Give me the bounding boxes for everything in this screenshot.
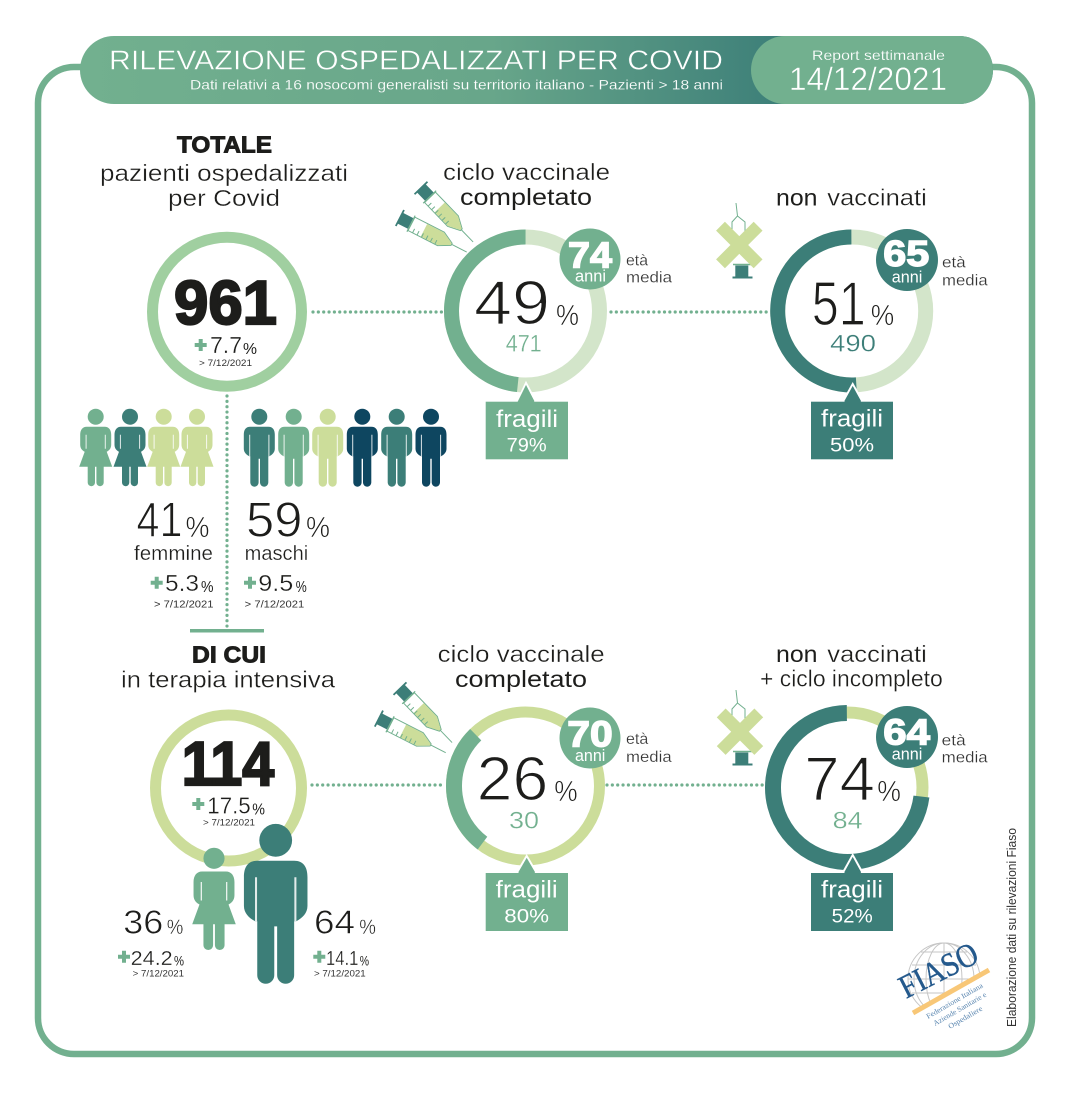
icon: large man [244,824,307,984]
stat: women in intensive care 36%: % [174,952,184,968]
heading: non vaccinati + ciclo incompleto: vaccinati [827,641,927,667]
badge: age 65: 65 [883,233,929,274]
report date pill: Report settimanale [812,47,945,63]
panel: total ring 961 [152,237,302,386]
donut chart: unvaccinated 51%: 490 [830,331,876,358]
header banner [80,36,993,104]
donut chart: intensive unvaccinated 74%: % [877,776,901,808]
donut chart: intensive vaccinated 26%: 30 [509,807,539,834]
stat: women in intensive care 36%: % [167,916,183,939]
logo: FIASO [896,942,990,1028]
logo: FIASO: Federazione Italiana [924,981,985,1021]
panel: women icons and 41%: femmine [134,543,213,565]
panel: intensive care ring 114: % [252,802,265,818]
donut chart: vaccinated 49%: % [556,300,579,332]
callout: fragili 80%: fragili [496,876,558,903]
callout: fragili 79%: fragili [496,406,558,433]
donut chart: intensive vaccinated 26% [425,686,626,886]
logo: FIASO: Ospedaliere [946,1004,985,1031]
heading: totale: pazienti ospedalizzati [100,160,348,186]
badge: age 65 [876,229,988,291]
heading: ciclo vaccinale completato top [443,159,610,210]
panel: total ring 961: 7.7 [210,332,242,358]
heading: non vaccinati + ciclo incompleto [760,641,943,692]
connector: dotted lines [190,312,768,785]
heading: non vaccinati + ciclo incompleto: non [776,641,818,667]
heading: non vaccinati top: vaccinati [827,184,927,210]
badge: age 74 [560,228,672,290]
badge: age 74: età [626,253,648,270]
heading: ciclo vaccinale completato top: completato [460,184,592,210]
badge: age 70 [560,708,672,768]
stat: men in intensive care 64%: % [360,952,369,968]
icon: large woman [192,848,236,950]
badge: age 64 [876,706,988,768]
heading: ciclo vaccinale completato bottom: ciclo vaccinale [438,641,605,667]
heading: totale [100,132,348,211]
icon: syringes bottom [375,682,459,761]
donut chart: intensive unvaccinated 74% [764,704,931,871]
report date pill [751,36,993,104]
badge: age 64: anni [892,744,922,763]
stat: women in intensive care 36%: > 7/12/2021 [133,969,184,979]
badge: age 70: anni [575,746,605,765]
panel: men icons and 59%: 9.5 [258,570,293,596]
badge: age 64: età [942,733,966,750]
panel: intensive care ring 114: 17.5 [207,793,251,819]
donut chart: intensive unvaccinated 74%: 74 [804,745,875,814]
donut chart: intensive unvaccinated 74%: 84 [833,807,863,834]
donut chart: unvaccinated 51%: % [871,300,894,332]
heading: non vaccinati top [776,184,927,210]
donut chart: intensive vaccinated 26%: 26 [477,745,548,814]
donut chart: intensive vaccinated 26%: % [554,776,578,808]
heading: totale: TOTALE [177,132,272,158]
stat: men in intensive care 64%: 64 [314,903,355,940]
stat: women in intensive care 36% [118,903,184,979]
heading: non vaccinati + ciclo incompleto: + ciclo incompleto [760,666,943,692]
heading: non vaccinati top: non [776,184,818,210]
badge: age 74: media [626,270,672,287]
panel: women icons and 41%: > 7/12/2021 [154,599,214,610]
heading: di cui in terapia intensiva [121,641,335,693]
badge: age 65: media [942,273,988,290]
icon: crossed syringe bottom [721,690,759,764]
badge: age 74: anni [575,267,606,286]
stat: women in intensive care 36%: 24.2 [131,948,173,970]
donut chart: vaccinated 49%: 471 [506,331,542,358]
logo: FIASO: FIASO [893,936,984,1006]
stat: men in intensive care 64%: > 7/12/2021 [314,969,366,979]
badge: age 64: media [942,750,988,767]
heading: ciclo vaccinale completato top: ciclo vaccinale [443,159,610,185]
panel: women icons and 41%: 5.3 [165,570,199,596]
panel: total ring 961: > 7/12/2021 [199,358,252,368]
icon: syringes top [396,182,480,260]
badge: age 65: anni [892,268,922,287]
panel: women icons and 41%: % [201,579,214,596]
callout: fragili 52%: 52% [832,907,873,928]
heading: di cui in terapia intensiva: DI CUI [192,641,266,667]
heading: di cui in terapia intensiva: in terapia intensiva [121,667,335,693]
callout: fragili 50%: fragili [821,406,883,433]
stat: men in intensive care 64%: 14.1 [326,948,358,970]
logo: FIASO: Aziende Sanitarie e [932,990,989,1028]
donut chart: unvaccinated 51%: 51 [812,270,866,339]
panel: men icons and 59%: > 7/12/2021 [245,599,305,610]
panel: men icons and 59%: % [296,579,307,596]
panel: women icons and 41%: 41 [136,494,182,548]
callout: fragili 50%: 50% [830,436,874,457]
stat: women in intensive care 36%: 36 [123,903,163,940]
panel: women icons and 41%: % [186,512,210,544]
panel: intensive care ring 114: 114 [182,730,275,799]
callout: fragili 79% [486,383,568,459]
callout: fragili 52%: fragili [821,876,883,903]
badge: age 74: 74 [568,235,612,276]
panel: women icons and 41% [79,409,214,610]
callout: fragili 52% [811,855,893,931]
icon: crossed syringe top [720,203,758,278]
badge: age 70: età [626,731,648,748]
stat: men in intensive care 64% [313,903,376,979]
report date pill: 14/12/2021 [789,61,947,97]
panel: intensive care ring 114 [156,715,302,861]
donut chart: vaccinated 49% [444,230,607,392]
callout: fragili 50% [811,384,893,459]
heading: ciclo vaccinale completato bottom: completato [455,666,587,692]
heading: ciclo vaccinale completato bottom [438,641,605,692]
badge: age 70: 70 [567,714,613,755]
badge: age 70: media [626,749,672,766]
source note: Elaborazione dati su rilevazioni Fiaso [1004,828,1019,1027]
stat: men in intensive care 64%: % [359,916,376,939]
heading: totale: per Covid [168,185,280,211]
badge: age 65: età [942,255,966,272]
badge: age 64: 64 [883,711,930,752]
callout: fragili 80%: 80% [504,907,549,928]
title: RILEVAZIONE OSPEDALIZZATI PER COVID [109,44,723,76]
panel: men icons and 59%: % [306,512,330,544]
panel: total ring 961: 961 [174,269,277,338]
panel: men icons and 59%: maschi [245,543,308,565]
panel: intensive care ring 114: > 7/12/2021 [203,817,255,827]
panel: total ring 961: % [243,341,257,358]
panel: men icons and 59%: 59 [246,494,302,548]
donut chart: unvaccinated 51% [773,232,930,390]
callout: fragili 79%: 79% [507,436,547,457]
donut chart: vaccinated 49%: 49 [474,269,550,338]
panel: men icons and 59% [244,409,446,610]
callout: fragili 80% [486,856,568,931]
subtitle: Dati relativi a 16 nosocomi generalisti su territorio italiano - Pazienti > 18 anni [190,76,723,92]
